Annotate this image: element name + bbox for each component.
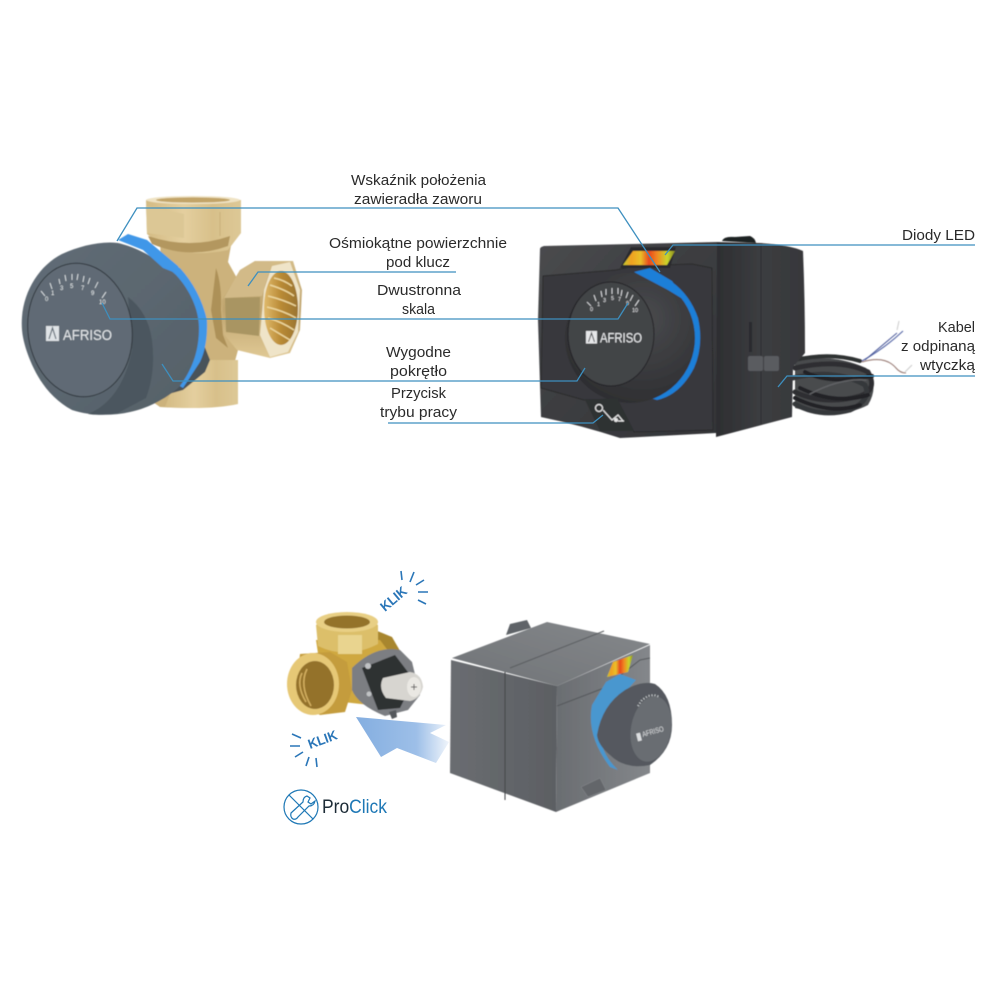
cable coil (793, 356, 874, 413)
valve body brass (146, 196, 241, 408)
AFRISO logo on valve (46, 326, 112, 344)
actuator scale (587, 288, 639, 314)
AFRISO logo on actuator: AFRISO (600, 330, 642, 346)
dial body (597, 683, 672, 766)
left fitting (295, 652, 352, 715)
dial scale: 1 (51, 291, 55, 297)
actuator knob face (568, 282, 654, 386)
dial scale: 5 (70, 284, 74, 290)
actuator scale: 10 (632, 308, 638, 314)
dial scale: 3 (60, 286, 64, 292)
label: position indicator: Wskaźnik położenia (351, 172, 487, 189)
KLIK top (377, 571, 428, 614)
left face (450, 660, 557, 812)
small brass valve with coupling (287, 612, 423, 719)
actuator knob blue ring (640, 276, 700, 400)
actuator scale: 1 (597, 302, 600, 308)
rear side fitting (370, 630, 403, 672)
rays bottom (290, 734, 317, 767)
label: position indicator: zawieradła zaworu (354, 191, 482, 208)
label: two-sided scale: Dwustronna (377, 282, 462, 299)
dial scale: 7 (81, 286, 85, 292)
dial scale (41, 274, 106, 306)
front panel recess (541, 264, 713, 432)
actuator blue tab (634, 268, 686, 301)
icon: wrench in circle (284, 790, 318, 824)
top fitting (316, 616, 378, 653)
dial face (626, 693, 676, 765)
right face (556, 645, 650, 812)
label: two-sided scale (377, 282, 462, 318)
label: mode button (380, 385, 458, 421)
side port octagonal nut (222, 261, 302, 358)
callout leader lines (102, 208, 975, 423)
side clips (748, 322, 779, 371)
LED window (607, 655, 633, 677)
electric actuator (538, 236, 912, 438)
label: cable: Kabel (938, 319, 975, 336)
label: comfortable knob: Wygodne (386, 344, 451, 361)
label: octagonal surfaces (329, 235, 507, 271)
AFRISO logo (636, 724, 665, 741)
label: mode button: trybu pracy (380, 404, 458, 421)
wordmark: ProClick (322, 796, 387, 818)
label: cable: wtyczką (919, 357, 976, 374)
actuator knob (565, 273, 695, 403)
AFRISO logo on valve: AFRISO (63, 328, 112, 344)
top handle bump (722, 236, 756, 243)
gray coupling plate (352, 649, 420, 716)
handle (506, 620, 531, 635)
KLIK bottom: KLIK (306, 727, 339, 752)
top face (452, 622, 650, 686)
wires (862, 321, 912, 373)
mode button (581, 778, 606, 797)
dial scale: 9 (91, 291, 95, 297)
AFRISO logo on actuator (586, 330, 642, 346)
dial scale: 10 (99, 300, 106, 306)
label: octagonal surfaces: Ośmiokątne powierzchnie (329, 235, 507, 252)
AFRISO logo: AFRISO (641, 724, 665, 739)
actuator scale: 3 (603, 298, 606, 304)
actuator scale: 7 (618, 297, 621, 303)
KLIK bottom (290, 727, 339, 767)
blue ring (591, 674, 636, 770)
label: octagonal surfaces: pod klucz (386, 254, 450, 271)
rays top (401, 571, 428, 604)
actuator scale: 0 (590, 307, 593, 313)
brass valve with dial (19, 196, 302, 415)
valve body (316, 640, 395, 705)
arrow (356, 717, 449, 763)
actuator scale: 5 (611, 296, 614, 302)
label: position indicator (351, 172, 487, 208)
front housing (538, 242, 717, 438)
label: cable (901, 319, 976, 374)
side housing (716, 242, 805, 437)
ProClick logo (284, 790, 387, 824)
label: cable: z odpinaną (901, 338, 976, 355)
blue indicator tab (118, 234, 183, 276)
label: comfortable knob: pokrętło (390, 363, 447, 380)
LED diodes (623, 251, 675, 265)
dial face (19, 256, 141, 404)
dial scale: 0 (45, 297, 49, 303)
dial grip shade (88, 297, 153, 415)
label: two-sided scale: skala (402, 301, 436, 318)
dial body (22, 243, 199, 415)
dark rear of dial (165, 340, 210, 395)
label: mode button: Przycisk (391, 385, 446, 402)
KLIK top: KLIK (377, 583, 410, 614)
label: LEDs: Diody LED (902, 227, 975, 244)
dial ticks (638, 695, 660, 706)
actuator scale: 9 (626, 301, 629, 307)
blue position indicator ring (165, 262, 207, 388)
label: comfortable knob (386, 344, 451, 380)
white knob (381, 672, 423, 701)
LED window (620, 247, 676, 268)
mode button (585, 398, 634, 431)
gray actuator (450, 620, 676, 812)
